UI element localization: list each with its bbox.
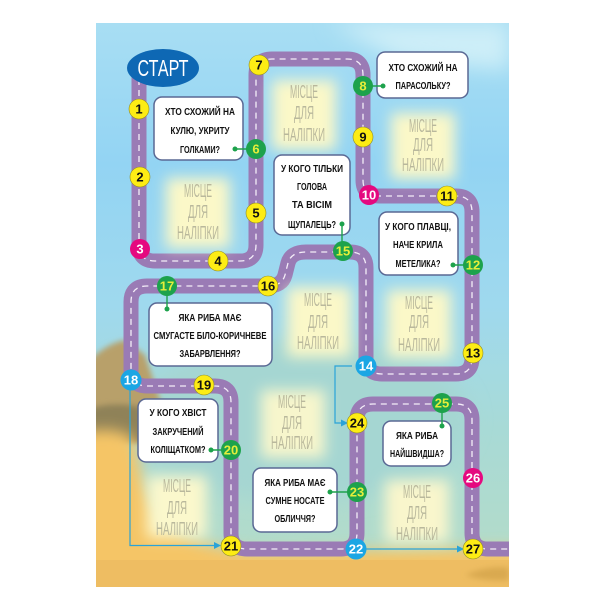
question card: node 6 (154, 97, 243, 160)
node 17: 17 (160, 278, 174, 294)
node 8 (353, 76, 373, 96)
sticker place E: ДЛЯ (409, 312, 429, 332)
node 23: 23 (350, 484, 364, 500)
start badge: СТАРТ (138, 55, 188, 81)
node 24: 24 (350, 416, 365, 430)
node 25: 25 (435, 396, 449, 410)
connector 25 to card (440, 403, 444, 428)
question card: node 6: КУЛЮ, УКРИТУ (170, 125, 230, 137)
question card: node 25: ЯКА РИБА (396, 430, 438, 442)
start badge (127, 49, 199, 87)
node 18: 18 (124, 372, 138, 388)
sticker place B: НАЛІПКИ (283, 125, 325, 145)
question card: node 15: ТА ВІСІМ (292, 199, 332, 211)
question card: node 15: ГОЛОВА (297, 181, 327, 193)
sticker place F: МІСЦЕ (278, 392, 306, 412)
connector 12 to card (450, 262, 473, 268)
underwater background (96, 23, 509, 587)
node 15 (333, 241, 353, 261)
question card: node 23: ОБЛИЧЧЯ? (274, 513, 316, 525)
node 15: 15 (336, 244, 350, 258)
node 3 (130, 239, 150, 259)
question card: node 12: МЕТЕЛИКА? (396, 258, 440, 270)
question card: node 23: СУМНЕ НОСАТЕ (266, 495, 324, 507)
sticker place C: НАЛІПКИ (402, 155, 444, 175)
connector 6 to card (232, 146, 256, 152)
node 2: 2 (136, 170, 144, 184)
sticker place A (166, 178, 230, 248)
question card: node 23 (253, 468, 337, 532)
sticker place F (261, 390, 325, 458)
sticker place H: МІСЦЕ (403, 482, 431, 502)
node 21 (221, 536, 241, 556)
question card: node 6: ГОЛКАМИ? (180, 144, 220, 156)
sticker place A: МІСЦЕ (184, 181, 212, 201)
question card: node 12 (379, 212, 458, 275)
sticker place E (387, 290, 451, 358)
sticker place F: НАЛІПКИ (271, 433, 313, 453)
node 26 (463, 468, 483, 488)
connector 20 to card (208, 448, 231, 452)
question card: node 8 (377, 52, 468, 98)
shortcut arrow 22 to 27 (365, 546, 464, 552)
question card: node 12: У КОГО ПЛАВЦІ, (385, 221, 451, 233)
node 9: 9 (359, 130, 367, 144)
connector 8 to card (363, 84, 386, 88)
node 21: 21 (224, 538, 238, 554)
sticker place E: МІСЦЕ (405, 293, 433, 313)
question card: node 17: СМУГАСТЕ БІЛО-КОРИЧНЕВЕ (154, 330, 266, 342)
node 14 (356, 356, 376, 376)
winding game path (131, 59, 509, 549)
question card: node 15 (274, 155, 350, 235)
node 27 (463, 539, 483, 559)
question card: node 17: ЗАБАРВЛЕННЯ? (180, 348, 240, 360)
node 16 (258, 276, 278, 296)
sticker place D: ДЛЯ (308, 312, 328, 332)
sticker place C: ДЛЯ (413, 135, 433, 155)
node 12 (463, 255, 483, 275)
connector 23 to card (328, 490, 357, 494)
sticker place D: НАЛІПКИ (297, 333, 339, 353)
sticker place F: ДЛЯ (282, 413, 302, 433)
sticker place A: ДЛЯ (188, 202, 208, 222)
question card: node 8: ХТО СХОЖИЙ НА (388, 61, 458, 74)
node 6 (246, 139, 266, 159)
node 7 (249, 55, 269, 75)
sticker place G: ДЛЯ (167, 498, 187, 518)
node 24 (347, 413, 367, 433)
question card: node 25: НАЙШВИДША? (390, 447, 444, 460)
sticker place D (287, 287, 351, 357)
sticker place G: МІСЦЕ (163, 476, 191, 496)
node 4: 4 (214, 254, 222, 268)
node 14: 14 (359, 358, 374, 374)
question card: node 20: У КОГО ХВІСТ (150, 407, 207, 419)
sticker place C (391, 113, 455, 179)
sticker place C: МІСЦЕ (409, 116, 437, 136)
question card: node 20: КОЛІЩАТКОМ? (150, 444, 206, 456)
node 10: 10 (362, 188, 376, 202)
node 2 (130, 167, 150, 187)
sticker place G (147, 476, 207, 539)
question card: node 23: ЯКА РИБА МАЄ (264, 477, 326, 489)
connector 17 to card (164, 286, 170, 312)
connector 15 to card (340, 222, 344, 251)
question card: node 25 (383, 421, 451, 466)
node 19 (194, 375, 214, 395)
node 6: 6 (252, 142, 260, 156)
node 22: 22 (349, 542, 363, 556)
sticker place H (385, 480, 449, 544)
question card: node 12: НАЧЕ КРИЛА (393, 239, 443, 251)
node 13 (463, 343, 483, 363)
node 23 (347, 482, 367, 502)
sticker place E: НАЛІПКИ (398, 335, 440, 355)
node 16: 16 (261, 278, 275, 294)
node 17 (157, 276, 177, 296)
node 7: 7 (255, 58, 263, 72)
question card: node 20 (138, 399, 218, 462)
sticker place B (272, 80, 336, 150)
question card: node 15: У КОГО ТІЛЬКИ (281, 163, 343, 175)
node 1: 1 (135, 102, 143, 116)
question card: node 8: ПАРАСОЛЬКУ? (396, 80, 450, 92)
node 11: 11 (440, 188, 454, 204)
node 27: 27 (466, 542, 480, 556)
sticker place D: МІСЦЕ (304, 290, 332, 310)
question card: node 17 (149, 303, 272, 366)
node 3: 3 (136, 242, 144, 256)
sticker place B: ДЛЯ (294, 103, 314, 123)
node 19: 19 (197, 378, 211, 392)
node 5 (246, 203, 266, 223)
node 20: 20 (224, 442, 238, 458)
node 13: 13 (466, 346, 480, 360)
node 8: 8 (359, 78, 367, 94)
node 1 (129, 99, 149, 119)
question card: node 17: ЯКА РИБА МАЄ (178, 312, 242, 324)
question card: node 15: ЩУПАЛЕЦЬ? (288, 219, 336, 231)
node 26: 26 (466, 470, 480, 486)
sticker place H: НАЛІПКИ (396, 524, 438, 544)
node 12: 12 (466, 258, 480, 272)
node 22 (346, 538, 366, 560)
node 4 (208, 251, 228, 271)
question card: node 20: ЗАКРУЧЕНИЙ (152, 425, 204, 438)
shortcut arrow 14 to 24 (335, 366, 352, 426)
node 9 (353, 127, 373, 147)
node 18 (120, 370, 142, 390)
node 11 (437, 186, 457, 206)
node 5: 5 (252, 206, 260, 220)
sticker place A: НАЛІПКИ (177, 223, 219, 243)
node 25 (432, 393, 452, 413)
sticker place G: НАЛІПКИ (156, 519, 198, 539)
sticker place H: ДЛЯ (407, 503, 427, 523)
shortcut arrow 18 to 21 (130, 390, 221, 549)
node 10 (359, 185, 379, 205)
sticker place B: МІСЦЕ (290, 82, 318, 102)
question card: node 6: ХТО СХОЖИЙ НА (165, 105, 235, 118)
node 20 (221, 440, 241, 460)
